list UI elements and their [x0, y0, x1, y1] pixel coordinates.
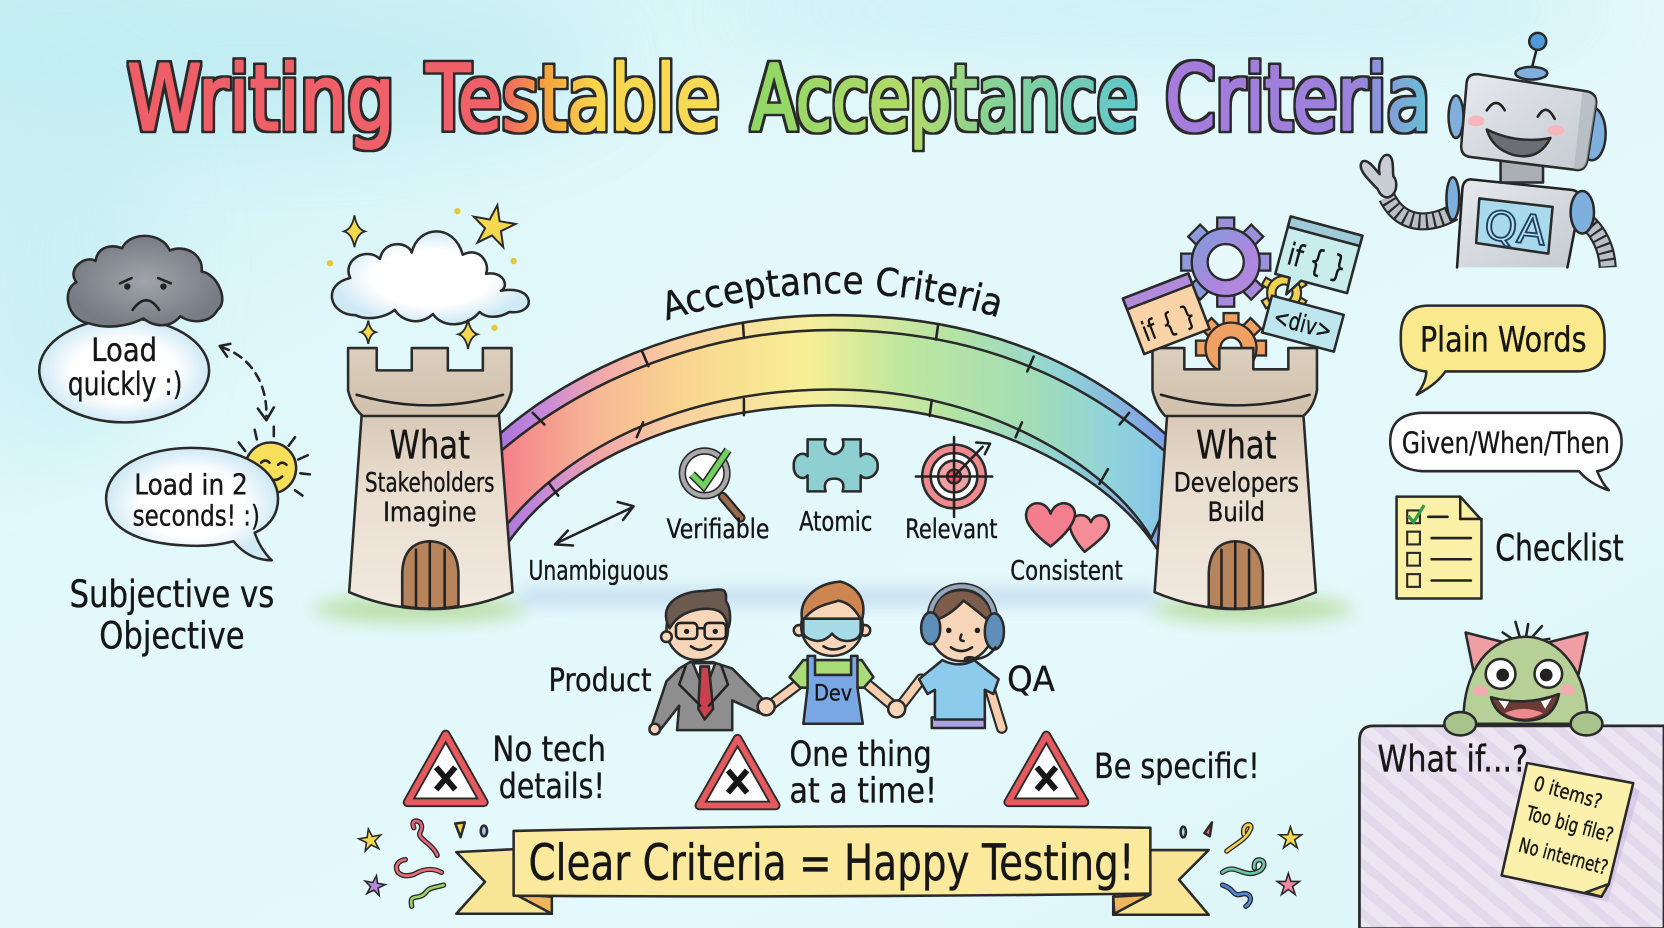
- tower label: What: [389, 423, 470, 468]
- antenna: [1531, 45, 1538, 70]
- tower label: [365, 423, 495, 528]
- ears: [1578, 107, 1606, 160]
- icon: unambiguous double arrow: Unambiguous: [528, 555, 669, 586]
- subjective speech bubble: Load: [91, 331, 157, 369]
- what if heading: What if...?: [1377, 739, 1528, 781]
- code window: left: [1123, 273, 1210, 354]
- icon: consistent hearts: Consistent: [1010, 555, 1123, 586]
- head: [930, 595, 993, 661]
- objective speech bubble: Load in 2: [134, 468, 248, 502]
- linked hands: [758, 698, 905, 717]
- title: Criteria: [1165, 46, 1431, 151]
- icon: verifiable magnifier: [666, 450, 769, 545]
- shirt: [790, 660, 873, 688]
- sparkle lower right: [458, 319, 478, 349]
- team: dev person: [768, 582, 897, 724]
- code window: left: if { }: [1137, 298, 1200, 348]
- speech bubble: given when then: Given/When/Then: [1402, 426, 1610, 461]
- head: [794, 625, 804, 636]
- right castle tower: [1152, 313, 1317, 609]
- speech bubble: given when then: [1390, 413, 1622, 490]
- icon: relevant target: [905, 437, 998, 545]
- tower label: Imagine: [383, 497, 476, 528]
- head: [1461, 74, 1596, 170]
- confetti left: [357, 821, 487, 906]
- confetti right: [1181, 822, 1302, 906]
- hand: [1361, 155, 1396, 197]
- icon: checklist: [1397, 497, 1624, 599]
- heading: acceptance criteria arc label: Acceptance Criteria: [666, 267, 1000, 320]
- speech bubble: plain words: Plain Words: [1420, 319, 1587, 360]
- purple gear: [1181, 218, 1270, 307]
- icon: relevant target: Relevant: [905, 514, 998, 545]
- tower label: [1174, 423, 1299, 528]
- tower label: Build: [1208, 497, 1265, 528]
- head: [666, 599, 728, 660]
- ground shadow under bridge: [313, 590, 1353, 623]
- smiling sun: [239, 427, 310, 496]
- banner body: [514, 826, 1150, 896]
- subjective speech bubble: quickly :): [68, 365, 183, 403]
- sad grey cloud: [68, 236, 222, 327]
- right arm: [1581, 218, 1608, 267]
- sad face: [120, 278, 171, 310]
- qa robot mascot: [1361, 33, 1608, 267]
- tower door: [402, 541, 458, 609]
- golden dots: [327, 208, 517, 331]
- objective speech bubble: seconds! :): [133, 498, 260, 532]
- icon: unambiguous double arrow: [528, 502, 669, 586]
- imagination cloud with stars: [327, 201, 529, 349]
- body: [1457, 179, 1580, 267]
- objective speech bubble: [106, 448, 278, 560]
- icon: atomic puzzle piece: Atomic: [799, 507, 872, 538]
- icon: checklist: Checklist: [1495, 527, 1624, 569]
- fluffy cloud: [332, 231, 529, 324]
- pants: [932, 717, 985, 728]
- title: [127, 46, 1431, 151]
- code gears and snippets: [1123, 216, 1362, 354]
- face: [1487, 103, 1555, 119]
- code window: top right: if { }: [1284, 236, 1350, 287]
- suit: [652, 662, 767, 730]
- subjective speech bubble: [39, 318, 209, 422]
- gold star: [469, 201, 518, 249]
- tower label: Developers: [1174, 467, 1299, 498]
- goggles: [803, 619, 861, 641]
- sparkle lower left: [361, 320, 376, 344]
- sticky note: [1502, 763, 1640, 902]
- warning: one thing at a time: at a time!: [790, 770, 937, 811]
- shirt: [919, 660, 999, 720]
- icon: verifiable magnifier: Verifiable: [666, 514, 769, 545]
- warning: be specific: [1008, 735, 1260, 802]
- arms: [768, 681, 802, 707]
- code window: top right: [1271, 216, 1362, 310]
- cloud puff: [68, 236, 222, 327]
- icon: consistent hearts: [1010, 503, 1123, 586]
- tower label: Stakeholders: [365, 467, 495, 498]
- sticky note: 0 items?: [1531, 771, 1605, 814]
- warning: one thing at a time: One thing: [790, 734, 932, 775]
- sticky note: Too big file?: [1523, 801, 1616, 847]
- sparkle left: [344, 215, 365, 247]
- dashed arrow between statements: [220, 344, 274, 420]
- tower crown: [348, 348, 512, 416]
- left arm: [1387, 197, 1454, 221]
- orange gear: [1196, 313, 1266, 374]
- tower label: What: [1196, 423, 1277, 468]
- warning: one thing at a time: [699, 734, 937, 811]
- neck: [1501, 157, 1543, 183]
- tower body: [349, 412, 513, 609]
- rainbow bridge: [483, 315, 1183, 557]
- yellow gear: [1262, 270, 1306, 316]
- arms: [900, 679, 921, 707]
- subjective vs objective caption: Objective: [99, 614, 245, 657]
- subjective vs objective caption: Subjective vs: [70, 573, 274, 616]
- team: product person: [549, 589, 767, 734]
- purple panel: [1359, 726, 1664, 928]
- overalls: [803, 656, 863, 724]
- banner text: Clear Criteria = Happy Testing!: [528, 834, 1134, 892]
- qa screen: [1476, 198, 1553, 254]
- dev label: Dev: [814, 680, 852, 706]
- label: QA: [1007, 659, 1055, 700]
- headset: [930, 586, 995, 626]
- left castle tower: [348, 348, 513, 609]
- warning: no tech details: [408, 729, 606, 807]
- tower body: [1155, 412, 1316, 609]
- subjective vs objective caption: [70, 573, 274, 657]
- team: qa person: [900, 586, 1055, 728]
- sticky note: No internet?: [1516, 833, 1611, 880]
- tower door: [1209, 541, 1263, 609]
- shoulders: [1571, 191, 1594, 233]
- warning: no tech details: No tech: [492, 729, 606, 770]
- warning: no tech details: details!: [499, 766, 605, 807]
- title: Acceptance: [751, 46, 1138, 151]
- banner: [456, 826, 1209, 915]
- speech bubble: plain words: [1401, 306, 1605, 395]
- right tail: [1113, 850, 1209, 915]
- icon: atomic puzzle piece: [794, 439, 878, 538]
- title: Writing: [127, 46, 395, 151]
- left tail: [456, 849, 552, 914]
- qa robot mascot: QA: [1482, 202, 1549, 255]
- edge case panel: [1359, 622, 1664, 928]
- warning: be specific: Be specific!: [1094, 746, 1260, 787]
- left hand: [649, 724, 660, 734]
- code window: div: <div>: [1270, 302, 1335, 345]
- tower crown: [1152, 348, 1317, 416]
- label: Product: [549, 661, 652, 699]
- title: Testable: [426, 46, 720, 151]
- monster: [1444, 622, 1602, 735]
